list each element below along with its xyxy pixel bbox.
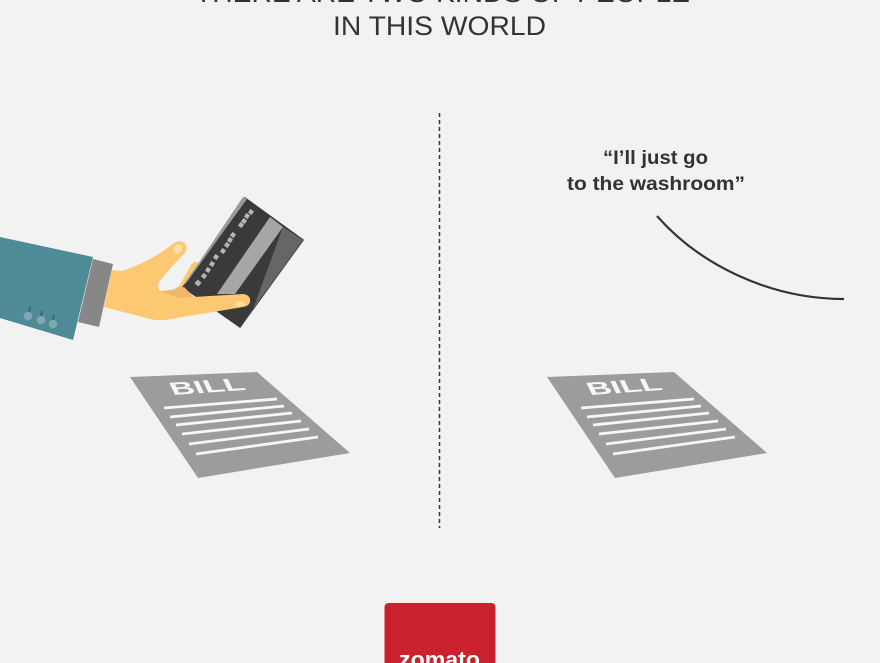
text: washroom quote: [567, 148, 745, 195]
icon: bill left: BILL: [165, 374, 249, 399]
icon: suit sleeve: [0, 237, 113, 340]
icon: hand: [104, 241, 250, 320]
text: washroom quote: to the washroom”: [567, 174, 745, 195]
icon: bill left: [130, 372, 350, 478]
icon: bill right: [547, 372, 767, 478]
icon: credit card: [183, 197, 303, 327]
icon: hand fingers behind card: [165, 262, 200, 296]
panel: person paying: [0, 197, 303, 340]
icon: sleeve buttons: [24, 307, 57, 328]
arrow: departure curve: [657, 216, 844, 299]
icon: bill right: BILL: [582, 374, 666, 399]
text: washroom quote: “I’ll just go: [603, 148, 708, 169]
title: IN THIS WORLD: [333, 11, 546, 41]
logo: zomato: [384, 603, 496, 663]
title: [195, 0, 690, 41]
